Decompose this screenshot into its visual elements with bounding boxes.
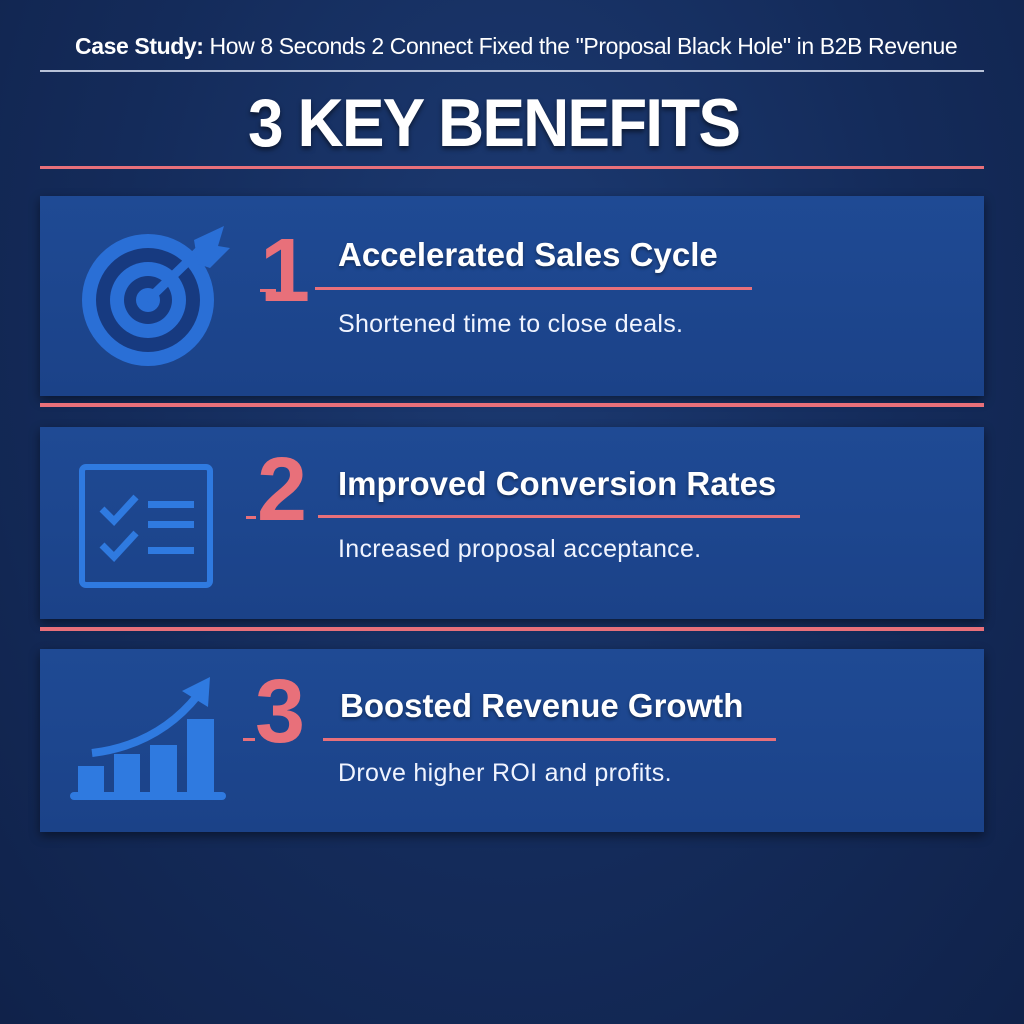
heading: Boosted Revenue Growth [340,687,743,724]
icon: growth chart [70,677,226,800]
text: Drove higher ROI and profits. [338,759,672,787]
text: Shortened time to close deals. [338,310,683,338]
title: 3 KEY BENEFITS [248,85,739,161]
number 1: 1 [260,221,310,321]
icon: checklist [79,464,213,588]
panel: benefit 2 [40,427,984,619]
panel: benefit 3 [40,649,984,832]
text: Increased proposal acceptance. [338,535,701,563]
panel: benefit 1 [40,196,984,396]
heading: Improved Conversion Rates [338,465,776,502]
icon: target [82,226,230,366]
header subtitle: Case Study: How 8 Seconds 2 Connect Fixed the "Proposal Black Hole" in B2B Revenue [75,33,957,59]
number 3: 3 [255,662,305,762]
number 2: 2 [257,440,307,540]
heading: Accelerated Sales Cycle [338,236,718,273]
